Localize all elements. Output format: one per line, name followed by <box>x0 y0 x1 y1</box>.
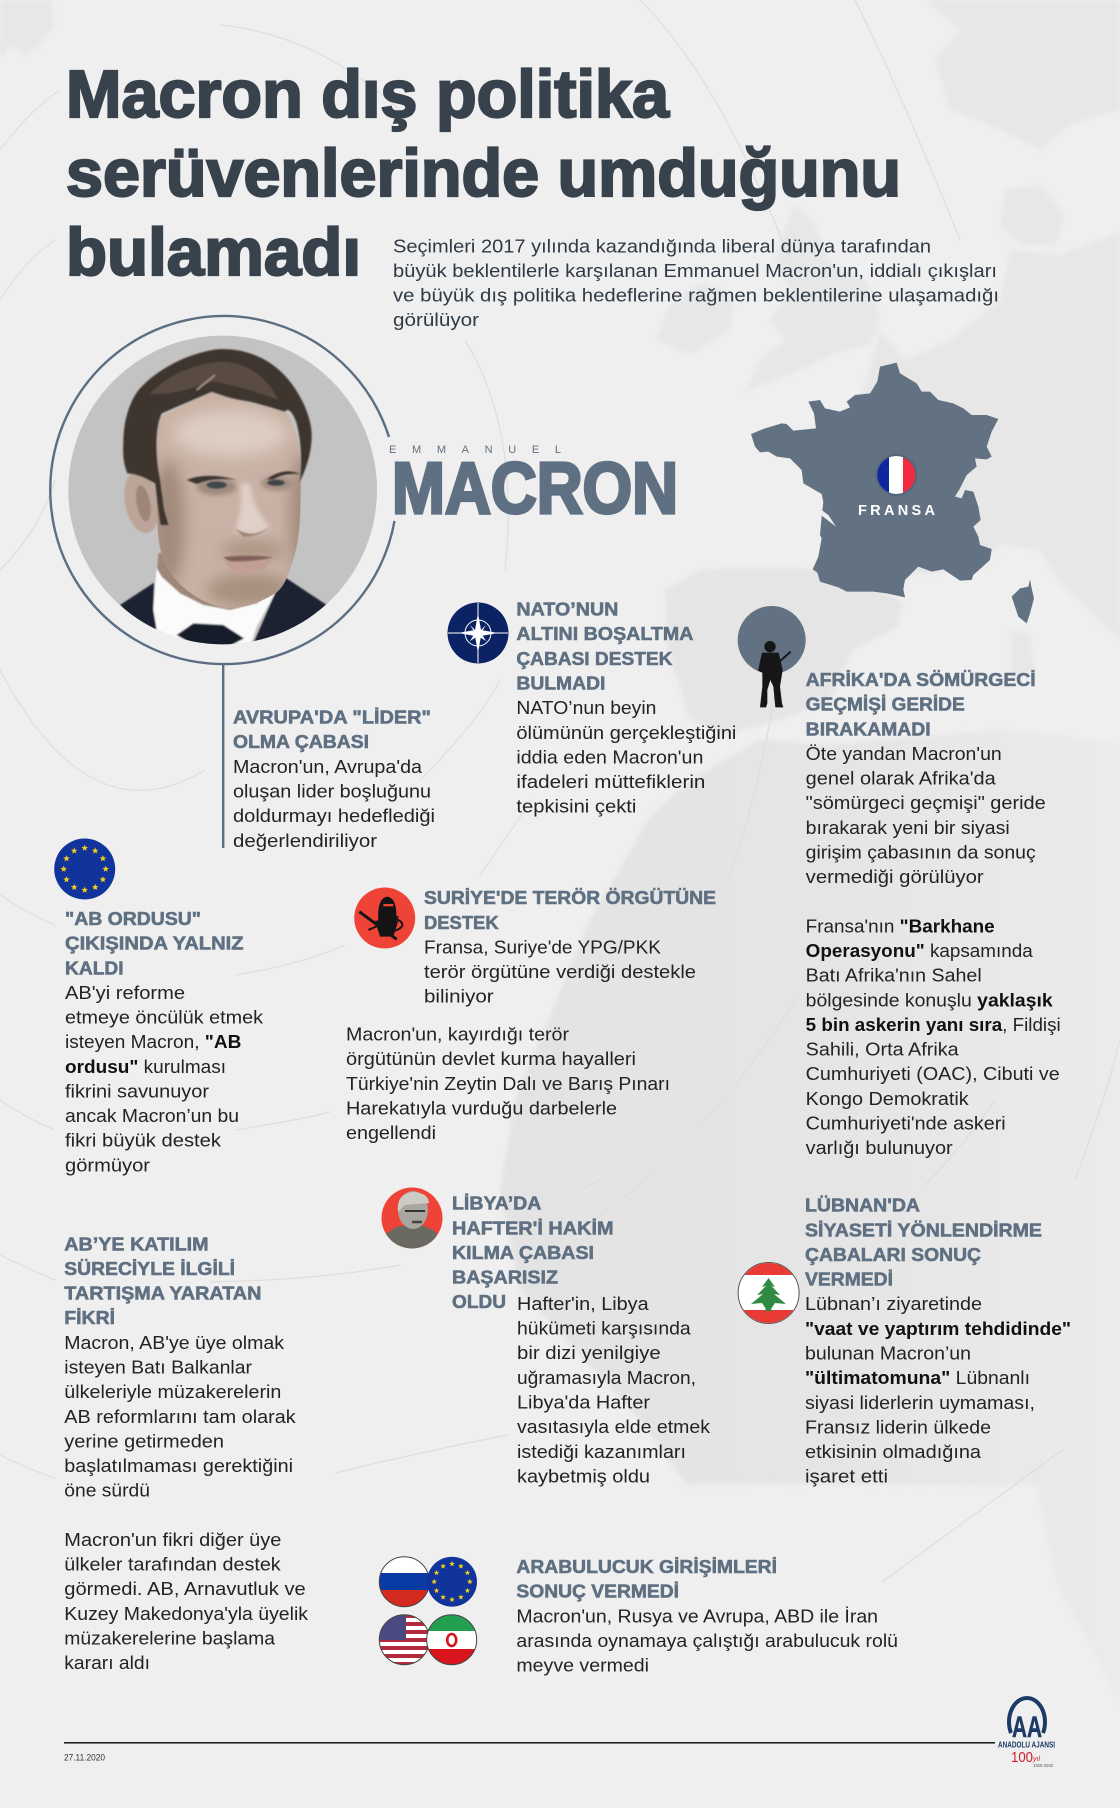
heading <box>516 1557 777 1602</box>
body text: görmüyor <box>65 1155 150 1175</box>
body text: kaybetmiş oldu <box>517 1466 650 1486</box>
heading: AVRUPA'DA "LİDER" <box>233 708 431 728</box>
logo: Anadolu Ajansı: 1920-2020 <box>1033 1763 1053 1768</box>
body text: Fransa, Suriye'de YPG/PKK <box>424 937 661 957</box>
heading: HAFTER'İ HAKİM <box>452 1218 614 1238</box>
body text <box>806 744 1046 887</box>
body text <box>805 1294 1071 1487</box>
body text: ölümünün gerçekleştiğini <box>516 723 736 743</box>
heading: AFRİKA'DA SÖMÜRGECİ <box>806 670 1036 690</box>
body text: başlatılmaması gerektiğini <box>64 1456 293 1476</box>
body text: Macron'un, Rusya ve Avrupa, ABD ile İran <box>516 1606 878 1626</box>
body text: Lübnan’ı ziyaretinde <box>805 1294 982 1314</box>
body text: vasıtasıyla elde etmek <box>517 1417 711 1437</box>
label: Fransa: FRANSA <box>858 503 936 519</box>
icon: Russian flag <box>379 1556 431 1607</box>
body text: Barkhane: Batı Afrika'nın Sahel <box>806 966 982 986</box>
heading: BIRAKAMADI <box>806 719 931 739</box>
body text: Barkhane: Kongo Demokratik <box>806 1089 970 1109</box>
heading <box>452 1194 614 1312</box>
body text: biliniyor <box>424 987 494 1007</box>
icon: Lebanese flag <box>738 1262 800 1324</box>
body text <box>516 698 736 817</box>
body text: öne sürdü <box>64 1481 150 1501</box>
intro text: büyük beklentilerle karşılanan Emmanuel Macron'un, iddialı çıkışları <box>393 261 997 281</box>
body text: outcome: görmedi. AB, Arnavutluk ve <box>64 1579 306 1599</box>
body text: istediği kazanımları <box>517 1442 686 1462</box>
body text: AB reformlarını tam olarak <box>64 1407 297 1427</box>
intro text: görülüyor <box>393 310 479 330</box>
panel: Libya <box>382 1188 711 1486</box>
body text: doldurmayı hedeflediği <box>233 806 435 826</box>
body text: fikri büyük destek <box>65 1131 222 1151</box>
heading: BAŞARISIZ <box>452 1268 558 1288</box>
body text: operations: Türkiye'nin Zeytin Dalı ve Barış Pınarı <box>346 1074 670 1094</box>
body text: isteyen Batı Balkanlar <box>64 1358 252 1378</box>
heading <box>64 1234 261 1328</box>
heading <box>806 670 1036 739</box>
body text: Barkhane: Cumhuriyeti (OAC), Cibuti ve <box>806 1064 1060 1084</box>
panel: Suriye <box>346 888 716 1143</box>
logo: Anadolu Ajansı: yıl <box>1032 1756 1040 1763</box>
portrait ring <box>50 316 395 664</box>
body text: outcome: müzakerelerine başlama <box>64 1628 276 1648</box>
body text: Barkhane: Cumhuriyeti'nde askeri <box>806 1113 1006 1133</box>
body text: tepkisini çekti <box>516 797 636 817</box>
heading: OLDU <box>452 1292 506 1312</box>
body text: "ültimatomuna" Lübnanlı <box>805 1368 1030 1388</box>
body text: "sömürgeci geçmişi" geride <box>806 793 1046 813</box>
heading: LÜBNAN'DA <box>805 1196 920 1216</box>
body text: meyve vermedi <box>516 1656 649 1676</box>
body text <box>233 757 435 851</box>
heading: SÜRECİYLE İLGİLİ <box>64 1259 235 1279</box>
title: Macron dış politika <box>66 57 670 132</box>
intro text: ve büyük dış politika hedeflerine rağmen beklentilerine ulaşamadığı <box>393 286 999 306</box>
intro text <box>393 236 999 330</box>
icon: US flag <box>379 1614 431 1666</box>
body text: outcome <box>64 1530 309 1673</box>
heading: SONUÇ VERMEDİ <box>516 1582 679 1602</box>
heading: BULMADI <box>516 674 605 694</box>
body text <box>517 1294 711 1486</box>
logo: Anadolu Ajansı: AA <box>1012 1711 1042 1744</box>
body text: ordusu" kurulması <box>65 1057 226 1077</box>
heading: TARTIŞMA YARATAN <box>64 1284 261 1304</box>
intro text: Seçimleri 2017 yılında kazandığında liberal dünya tarafından <box>393 236 931 256</box>
heading <box>233 708 431 752</box>
heading: NATO’NUN <box>516 600 618 620</box>
icon: Hafter portrait <box>382 1188 442 1255</box>
heading: OLMA ÇABASI <box>233 732 369 752</box>
body text: değerlendiriliyor <box>233 831 377 851</box>
body text: etmeye öncülük etmek <box>65 1008 264 1028</box>
body text: genel olarak Afrika'da <box>806 768 997 788</box>
body text: outcome: Macron'un fikri diğer üye <box>64 1530 281 1550</box>
heading <box>65 909 244 978</box>
heading: ARABULUCUK GİRİŞİMLERİ <box>516 1557 777 1577</box>
body text: Barkhane <box>806 916 1061 1158</box>
body text: bulunan Macron’un <box>805 1344 971 1364</box>
heading: "AB ORDUSU" <box>65 909 201 929</box>
body text: vermediği görülüyor <box>806 867 984 887</box>
body text: Barkhane: varlığı bulunuyor <box>806 1138 953 1158</box>
body text: bırakarak yeni bir siyasi <box>806 818 1010 838</box>
body text: bir dizi yenilgiye <box>517 1343 661 1363</box>
panel: Lübnan <box>738 1196 1071 1487</box>
panel: Afrika <box>738 606 1061 1158</box>
logo: Anadolu Ajansı <box>998 1698 1055 1768</box>
map of France <box>751 363 1034 623</box>
heading: FİKRİ <box>64 1308 115 1328</box>
body text: Macron, AB'ye üye olmak <box>64 1333 285 1353</box>
body text: Libya'da Hafter <box>517 1392 650 1412</box>
body text: outcome: kararı aldı <box>64 1653 150 1673</box>
panel: Arabuluculuk <box>379 1556 898 1676</box>
body text: Fransız liderin ülkede <box>805 1417 991 1437</box>
body text: Hafter'in, Libya <box>517 1294 650 1314</box>
name label: MACRON <box>392 449 678 529</box>
body text: isteyen Macron, "AB <box>65 1032 241 1052</box>
body text <box>65 983 264 1175</box>
heading: ÇABALARI SONUÇ <box>805 1245 981 1265</box>
body text: fikrini savunuyor <box>65 1081 209 1101</box>
heading: LİBYA’DA <box>452 1194 541 1214</box>
logo: Anadolu Ajansı: ANADOLU AJANSI <box>998 1740 1055 1750</box>
body text: hükümeti karşısında <box>517 1319 692 1339</box>
icon: NATO <box>448 602 508 664</box>
body text: Barkhane: Sahili, Orta Afrika <box>806 1040 960 1060</box>
body text: outcome: Kuzey Makedonya'yla üyelik <box>64 1604 309 1624</box>
heading: SİYASETİ YÖNLENDİRME <box>805 1220 1042 1240</box>
body text: Macron'un, Avrupa'da <box>233 757 423 777</box>
icon: EU flag <box>427 1557 477 1607</box>
body text: Barkhane: 5 bin askerin yanı sıra , Fildişi <box>806 1015 1061 1035</box>
body text: arasında oynamaya çalıştığı arabulucuk rolü <box>516 1631 898 1651</box>
heading <box>805 1196 1042 1290</box>
body text: operations: engellendi <box>346 1123 436 1143</box>
heading: ÇIKIŞINDA YALNIZ <box>65 934 244 954</box>
body text: ifadeleri müttefiklerin <box>516 772 705 792</box>
body text: etkisinin olmadığına <box>805 1442 982 1462</box>
body text: NATO’nun beyin <box>516 698 656 718</box>
body text: siyasi liderlerin uymaması, <box>805 1393 1035 1413</box>
body text: operations: Macron'un, kayırdığı terör <box>346 1025 569 1045</box>
title: serüvenlerinde umduğunu <box>66 136 901 211</box>
body text: Barkhane: bölgesinde konuşlu yaklaşık <box>806 990 1054 1010</box>
title <box>66 57 901 290</box>
heading: VERMEDİ <box>805 1270 893 1290</box>
portrait: Emmanuel Macron <box>50 316 395 848</box>
panel: NATO <box>448 600 736 817</box>
heading: DESTEK <box>424 913 499 933</box>
heading: AB’YE KATILIM <box>64 1234 209 1254</box>
body text <box>424 937 696 1007</box>
body text: girişim çabasının da sonuç <box>806 842 1036 862</box>
body text: işaret etti <box>805 1467 888 1487</box>
panel: Avrupa'da lider <box>233 708 435 851</box>
body text: outcome: ülkeler tarafından destek <box>64 1555 282 1575</box>
icon: EU flag <box>54 838 115 900</box>
heading: GEÇMİŞİ GERİDE <box>806 695 965 715</box>
body text: iddia eden Macron'un <box>516 747 703 767</box>
body text: ülkeleriyle müzakerelerin <box>64 1382 281 1402</box>
title: bulamadı <box>66 215 361 290</box>
heading: SURİYE'DE TERÖR ÖRGÜTÜNE <box>424 888 716 908</box>
icon: militant <box>354 888 415 948</box>
body text: operations: Harekatıyla vurduğu darbelerle <box>346 1098 617 1118</box>
heading <box>516 600 693 694</box>
logo: Anadolu Ajansı: 100 <box>1011 1749 1033 1766</box>
body text: uğramasıyla Macron, <box>517 1368 696 1388</box>
body text: Barkhane: Operasyonu" kapsamında <box>806 941 1034 961</box>
date: 27.11.2020 <box>64 1752 105 1764</box>
body text: operations <box>346 1025 670 1143</box>
heading <box>424 888 716 933</box>
panel: AB ordusu <box>54 838 264 1175</box>
heading: KILMA ÇABASI <box>452 1243 594 1263</box>
body text: yerine getirmeden <box>64 1431 224 1451</box>
heading: ALTINI BOŞALTMA <box>516 624 693 644</box>
connector line <box>222 664 224 848</box>
portrait photo <box>68 336 377 650</box>
icons: flags of Russia, EU, USA and Iran <box>379 1556 478 1667</box>
body text: terör örgütüne verdiği destekle <box>424 962 696 982</box>
body text: "vaat ve yaptırım tehdidinde" <box>805 1319 1071 1339</box>
body text <box>516 1606 898 1676</box>
body text: Öte yandan Macron'un <box>806 744 1002 764</box>
body text: AB'yi reforme <box>65 983 185 1003</box>
name label: EMMANUEL <box>389 444 561 456</box>
body text: operations: örgütünün devlet kurma hayalleri <box>346 1049 636 1069</box>
panel: AB'ye katılım <box>64 1234 309 1673</box>
body text <box>64 1333 297 1501</box>
icon: French flag <box>875 454 917 496</box>
icon: Iranian flag <box>426 1614 478 1667</box>
heading: KALDI <box>65 958 124 978</box>
heading: ÇABASI DESTEK <box>516 649 672 669</box>
body text: oluşan lider boşluğunu <box>233 782 431 802</box>
icon: soldier <box>738 606 806 707</box>
body text: ancak Macron’un bu <box>65 1106 239 1126</box>
body text: Barkhane: Fransa'nın "Barkhane <box>806 916 995 936</box>
